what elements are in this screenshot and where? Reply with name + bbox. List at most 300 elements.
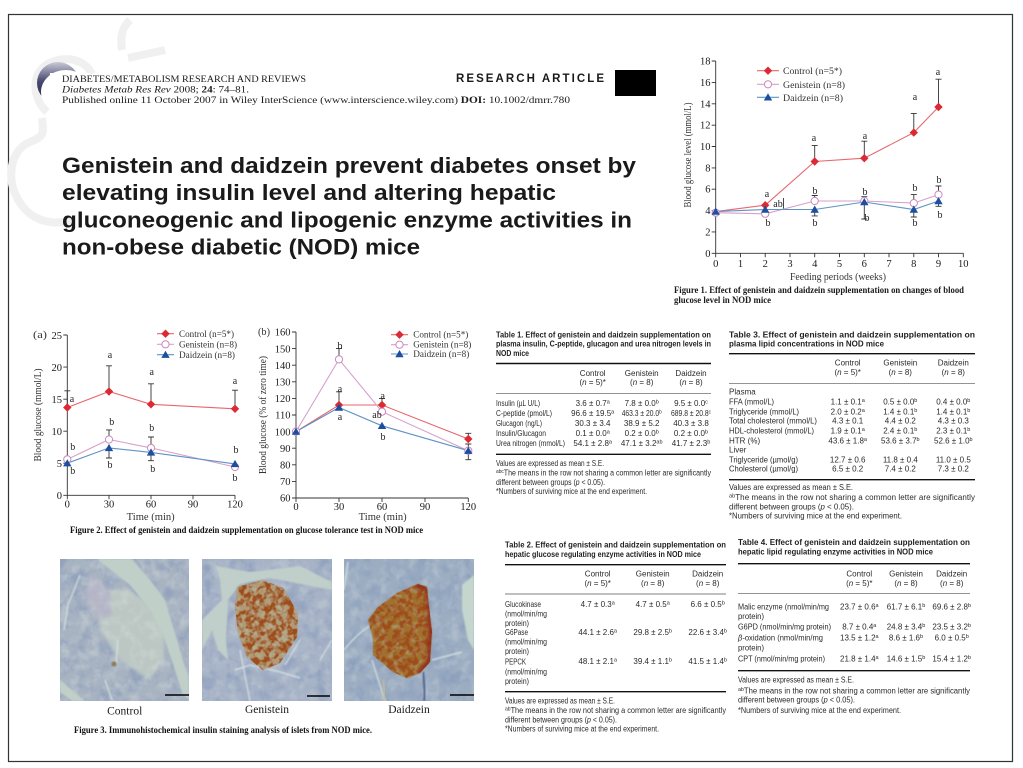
table 2: 4.7 ± 0.5: [636, 600, 667, 609]
table 1: 0.1 ± 0.0: [576, 429, 607, 438]
figure 2b line chart: 150: [275, 344, 290, 355]
figure 2a line chart: Time (min): [127, 512, 175, 523]
table 4: Genistein: [889, 570, 923, 579]
figure 2b line chart: 60: [280, 494, 290, 505]
figure 2 caption: Figure 2. Effect of genistein and daidzein supplementation on glucose tolerance test in NOD mice: [70, 525, 423, 535]
table 4: b: [922, 623, 925, 629]
table 1: Values are expressed as mean ± S.E.: [496, 459, 604, 468]
table 4: ab: [738, 687, 744, 693]
figure 1 line chart: 0: [705, 249, 710, 260]
table 4: 24.8 ± 3.4: [887, 622, 922, 631]
figure 2a line chart: Daidzein (n=8): [179, 350, 235, 361]
table 1: The means in the row not sharing a common letter are significantly: [504, 468, 711, 477]
figure 1 line chart: b: [812, 218, 818, 229]
figure 2a line chart: 25: [52, 331, 62, 342]
table 3: b: [914, 408, 917, 414]
table 3: Daidzein: [938, 359, 969, 368]
table 2: [505, 540, 727, 734]
table 3: Control: [835, 359, 861, 368]
table 3: 4.4 ± 0.2: [885, 417, 916, 426]
figure 2a line chart: 20: [52, 363, 62, 374]
table 2: protein): [505, 619, 529, 628]
figure 2a line chart: b: [234, 445, 238, 456]
table 1: c: [709, 410, 711, 416]
table 4: b: [968, 603, 971, 609]
figure 2a line chart: b: [70, 466, 75, 477]
figure 1 line chart: b: [864, 213, 870, 224]
figure 2b line chart: 120: [275, 394, 290, 405]
table 3: 2.4 ± 0.1: [883, 426, 914, 435]
table 2: b: [722, 600, 725, 606]
table 4: a: [876, 603, 880, 609]
figure 1 line chart: 9: [936, 259, 941, 270]
journal citation header: Published online 11 October 2007 in Wiley InterScience (www.interscience.wiley.com) DOI: 10.1002/dmrr.780: [62, 95, 570, 106]
table 4: 21.8 ± 1.4: [840, 655, 876, 664]
figure 2b line chart: 160: [275, 328, 290, 339]
figure 3 caption: Figure 3. Immunohistochemical insulin staining analysis of islets from NOD mice.: [74, 725, 372, 735]
table 2: b: [669, 658, 672, 664]
table 2: b: [724, 658, 727, 664]
table 1: NOD mice: [496, 348, 529, 358]
figure 2a line chart: Genistein (n=8): [179, 340, 237, 350]
figure 1 line chart: a: [936, 67, 941, 78]
table 3: 7.3 ± 0.2: [938, 465, 969, 474]
table 1: abc: [496, 469, 504, 475]
table 4: Daidzein: [936, 570, 967, 579]
figure 1 line chart: 12: [700, 121, 710, 132]
table 3: Plasma: [729, 388, 756, 397]
table 1: 40.3 ± 3.8: [673, 419, 709, 428]
table 1: different between groups (p < 0.05).: [496, 478, 605, 487]
table 1: a: [607, 400, 611, 406]
table 4: different between groups (p < 0.05).: [738, 696, 855, 705]
figure 2a line chart: a: [70, 394, 75, 405]
table 4: protein): [738, 612, 764, 621]
title: Genistein and daidzein prevent diabetes onset by: [62, 153, 637, 178]
table 1: 0.2 ± 0.0: [625, 429, 656, 438]
figure 2b line chart: a: [338, 384, 343, 395]
figure 2b line chart: 130: [275, 378, 290, 388]
figure 2a line chart: 0: [65, 500, 70, 510]
micrograph: control: [60, 559, 189, 701]
table 3: a: [862, 398, 866, 404]
table 3: Values are expressed as mean ± S.E.: [729, 483, 853, 492]
figure 1 line chart: b: [912, 218, 918, 229]
figure 1 line chart: a: [812, 133, 817, 144]
table 4: (n = 8): [940, 579, 964, 588]
table 2: (n = 8): [696, 579, 720, 588]
table 1: 38.9 ± 5.2: [624, 419, 660, 428]
table 3: (n = 8): [942, 368, 965, 377]
figure 2a line chart: (a): [33, 330, 48, 341]
figure 1 line chart: a: [765, 189, 770, 200]
table 4: Malic enzyme (nmol/min/mg: [738, 602, 829, 611]
figure 2b line chart: b: [380, 432, 386, 443]
table 3: Total cholesterol (mmol/L): [729, 417, 817, 426]
table 1: ab: [656, 440, 663, 446]
table 1: b: [659, 410, 662, 416]
figure 2a line chart: b: [70, 442, 75, 453]
table 1: Table 1. Effect of genistein and daidzein supplementation on: [496, 330, 711, 340]
figure 2b line chart: Time (min): [359, 512, 407, 523]
table 3: 11.0 ± 0.5: [936, 455, 971, 464]
table 2: Control: [585, 570, 611, 579]
table 2: protein): [505, 647, 529, 656]
table 4: β-oxidation (nmol/min/mg: [737, 633, 823, 642]
figure 2a line chart: 0: [57, 491, 62, 502]
table 1: Genistein: [625, 369, 659, 378]
table 1: *Numbers of surviving mice at the end experiment.: [496, 487, 647, 496]
table 1: Daidzein: [675, 369, 707, 378]
table 3: 53.6 ± 3.7: [881, 436, 917, 445]
table 3: b: [914, 427, 917, 433]
table 2: The means in the row not sharing a common letter are significantly: [511, 706, 726, 715]
figure 1 line chart: 2: [705, 227, 710, 238]
table 4: hepatic lipid regulating enzyme activities in NOD mice: [738, 546, 933, 556]
table 1: 7.8 ± 0.0: [625, 399, 656, 408]
table 4: The means in the row not sharing a common letter are significantly: [744, 686, 970, 695]
table 2: (nmol/min/mg: [505, 667, 547, 676]
table 3: (n = 8): [889, 368, 912, 377]
table 3: b: [914, 398, 917, 404]
figure 1 line chart: b: [766, 218, 770, 229]
table 2: 44.1 ± 2.6: [578, 628, 614, 637]
table 1: [496, 330, 711, 496]
table 1: b: [656, 400, 659, 406]
table 3: HTR (%): [729, 436, 760, 445]
table 4: 8.6 ± 1.6: [889, 633, 920, 642]
journal logo watermark: [11, 20, 165, 222]
figure 2b line chart: 70: [280, 477, 290, 488]
table 4: a: [873, 623, 877, 629]
table 3: plasma lipid concentrations in NOD mice: [729, 339, 884, 349]
figure 2b line chart: a: [338, 412, 343, 423]
figure 1 caption: [674, 285, 964, 305]
table 2: 4.7 ± 0.3: [581, 600, 612, 609]
figure 2b line chart: 100: [275, 427, 290, 438]
figure 1 line chart: 3: [787, 259, 793, 270]
table 2: Daidzein: [692, 570, 723, 579]
table 3: 0.4 ± 0.0: [936, 397, 967, 406]
journal citation header: DIABETES/METABOLISM RESEARCH AND REVIEWS: [62, 75, 306, 85]
table 3: b: [917, 437, 920, 443]
figure 2a line chart: Blood glucose (mmol/L): [33, 368, 44, 462]
table 4: 61.7 ± 6.1: [887, 602, 922, 611]
figure 2b line chart: 60: [377, 502, 387, 513]
micrograph: genistein: [202, 559, 332, 701]
table 2: b: [724, 628, 727, 634]
table 3: 2.3 ± 0.1: [936, 426, 967, 435]
table 2: (nmol/min/mg: [505, 610, 547, 619]
table 1: (n = 8): [630, 378, 654, 387]
figure 2b line chart: (b): [258, 327, 270, 338]
figure 1 line chart: Feeding periods (weeks): [790, 272, 886, 283]
table 4: (n = 5)*: [846, 579, 873, 588]
title: non-obese diabetic (NOD) mice: [62, 234, 420, 260]
table 1: a: [611, 410, 615, 416]
table 4: Control: [846, 570, 872, 579]
micrograph label: genistein: Genistein: [245, 704, 289, 716]
figure 2a line chart: b: [149, 423, 154, 434]
table 1: (n = 5)*: [579, 378, 606, 387]
figure 1 line chart: Blood glucose level (mmol/L): [683, 102, 694, 208]
table 3: 1.4 ± 0.1: [936, 407, 967, 416]
micrograph label: daidzein: Daidzein: [388, 704, 430, 716]
table 1: Urea nitrogen (mmol/L): [496, 439, 565, 448]
table 4: 15.4 ± 1.2: [932, 655, 968, 664]
table 1: 463.3 ± 20.0: [622, 409, 666, 418]
figure 2a line chart: 5: [57, 459, 62, 470]
table 3: b: [967, 408, 970, 414]
figure 1 line chart: 4: [812, 259, 818, 270]
figure 1 line chart: b: [862, 187, 868, 198]
table 2: 39.4 ± 1.1: [633, 657, 669, 666]
table 2: ab: [505, 706, 511, 712]
table 2: Glucokinase: [505, 600, 541, 609]
figure 1 line chart: b: [912, 183, 918, 194]
figure 2b line chart: ab: [372, 410, 382, 421]
table 4: 23.5 ± 3.2: [932, 622, 968, 631]
figure 2a line chart: [33, 329, 243, 523]
table 3: a: [864, 437, 868, 443]
figure 2a line chart: b: [232, 473, 238, 484]
table 3: Liver: [729, 446, 747, 455]
table 3: 0.5 ± 0.0: [883, 397, 914, 406]
figure 2a line chart: b: [150, 464, 155, 475]
figure 1 line chart: [683, 56, 969, 283]
table 4: b: [966, 634, 969, 640]
figure 2a line chart: Control (n=5*): [179, 329, 234, 340]
table 3: 12.7 ± 0.6: [830, 455, 866, 464]
table 1: 47.1 ± 3.2: [621, 439, 656, 448]
table 1: C-peptide (pmol/L): [496, 409, 552, 418]
table 2: a: [614, 628, 618, 634]
figure 2a line chart: 10: [52, 427, 62, 438]
table 2: Genistein: [636, 570, 670, 579]
table 4: b: [922, 655, 925, 661]
figure 1 line chart: Daidzein (n=8): [783, 93, 843, 104]
table 2: b: [669, 628, 672, 634]
table 4: Table 4. Effect of genistein and daidzein supplementation on: [738, 537, 970, 547]
table 2: a: [667, 600, 671, 606]
table 4: 6.0 ± 0.5: [935, 633, 966, 642]
table 3: [729, 329, 975, 520]
table 4: protein): [738, 643, 764, 652]
figure 1 line chart: ab: [773, 199, 783, 210]
table 2: (n = 5)*: [584, 579, 611, 588]
table 2: Table 2. Effect of genistein and daidzein supplementation on: [505, 540, 726, 550]
figure 2b line chart: Daidzein (n=8): [413, 349, 469, 360]
figure 1 line chart: b: [812, 186, 818, 197]
table 3: b: [967, 398, 970, 404]
table 1: b: [705, 430, 708, 436]
table 4: 69.6 ± 2.8: [932, 602, 968, 611]
figure 2b line chart: 120: [460, 502, 476, 513]
figure 2b line chart: Control (n=5*): [413, 330, 468, 340]
figure 2a line chart: 90: [188, 500, 198, 510]
table 3: 2.0 ± 0.2: [831, 407, 862, 416]
table 1: a: [609, 440, 613, 446]
table 3: ab: [729, 494, 735, 500]
table 4: *Numbers of surviving mice at the end experiment.: [738, 706, 901, 715]
figure 2b line chart: 80: [280, 460, 290, 472]
title: elevating insulin level and altering hepatic: [62, 180, 556, 205]
table 2: 29.8 ± 2.5: [633, 628, 669, 637]
table 1: (n = 8): [679, 378, 703, 387]
figure 1 line chart: Control (n=5*): [783, 66, 842, 77]
table 1: b: [707, 440, 710, 446]
figure 1 line chart: b: [938, 210, 942, 221]
figure 1 line chart: 2: [763, 259, 768, 270]
table 2: 22.6 ± 3.4: [688, 628, 724, 637]
table 3: a: [862, 408, 866, 414]
table 1: Insulin/Glucagon: [496, 429, 546, 438]
research article label: RESEARCH ARTICLE: [456, 73, 604, 85]
table 3: 1.4 ± 0.1: [883, 407, 914, 416]
table 3: Cholesterol (µmol/g): [729, 465, 798, 474]
figure 2a line chart: a: [108, 350, 113, 361]
figure 1 caption: glucose level in NOD mice: [674, 295, 771, 305]
title: gluconeogenic and lipogenic enzyme activities in: [62, 208, 632, 232]
table 4: b: [920, 634, 923, 640]
table 1: plasma insulin, C-peptide, glucagon and urea nitrogen levels in: [496, 339, 711, 349]
table 3: Genistein: [883, 359, 917, 368]
figure 1 line chart: 10: [700, 142, 710, 153]
figure 1 line chart: 1: [738, 259, 743, 270]
figure 1 line chart: 10: [958, 259, 969, 270]
micrograph: daidzein: [344, 559, 474, 701]
figure 2a line chart: 30: [104, 500, 114, 510]
title: [62, 153, 637, 260]
table 4: 8.7 ± 0.4: [842, 622, 873, 631]
table 4: a: [876, 655, 880, 661]
table 4: G6PD (nmol/min/mg protein): [738, 622, 831, 631]
table 3: 1.9 ± 0.1: [831, 426, 862, 435]
figure 2b line chart: b: [338, 341, 342, 352]
figure 1 caption: Figure 1. Effect of genistein and daidzein supplementation on changes of blood: [674, 285, 964, 295]
table 1: Insulin (µL U/L): [496, 399, 540, 408]
black redaction box: [615, 70, 656, 96]
figure 1 line chart: a: [913, 92, 918, 103]
table 1: 30.3 ± 3.4: [575, 419, 611, 428]
table 3: Triglyceride (mmol/L): [729, 407, 799, 416]
figure 1 line chart: 16: [700, 78, 710, 89]
table 4: 13.5 ± 1.2: [840, 633, 876, 642]
table 1: Glucagon (ng/L): [496, 419, 542, 428]
table 1: 3.6 ± 0.7: [576, 399, 607, 408]
figure 2b line chart: 30: [334, 502, 344, 513]
table 3: 7.4 ± 0.2: [885, 465, 916, 474]
table 3: 4.3 ± 0.1: [832, 417, 864, 426]
table 2: a: [612, 600, 616, 606]
table 3: b: [967, 427, 970, 433]
figure 2b line chart: 90: [420, 502, 430, 513]
table 1: c: [705, 400, 708, 406]
table 3: 1.1 ± 0.1: [831, 397, 862, 406]
figure 2a line chart: 120: [227, 500, 243, 510]
table 4: b: [922, 603, 925, 609]
table 4: b: [968, 623, 971, 629]
figure 2b line chart: [258, 327, 476, 523]
table 3: Triglyceride (µmol/g): [729, 455, 798, 464]
table 2: *Numbers of surviving mice at the end experiment.: [505, 725, 659, 734]
figure 2b line chart: 90: [280, 444, 290, 455]
table 3: *Numbers of surviving mice at the end experiment.: [729, 511, 902, 520]
figure 2b line chart: Blood glucose (% of zero time): [258, 356, 269, 474]
table 3: b: [970, 437, 973, 443]
table 1: a: [607, 430, 611, 436]
figure 2a line chart: 15: [52, 395, 62, 406]
table 1: 9.5 ± 0.0: [674, 399, 705, 408]
table 2: 6.6 ± 0.5: [691, 600, 722, 609]
table 2: different between groups (p < 0.05).: [505, 715, 617, 724]
figure 1 line chart: 6: [705, 185, 710, 196]
table 3: 43.6 ± 1.8: [828, 436, 864, 445]
table 3: (n = 5)*: [834, 368, 861, 377]
table 4: (n = 8): [894, 579, 918, 588]
table 3: a: [862, 427, 866, 433]
figure 2a line chart: 60: [146, 500, 156, 510]
table 3: 52.6 ± 1.0: [934, 436, 970, 445]
figure 2b line chart: 140: [275, 361, 290, 372]
table 1: 96.6 ± 19.5: [571, 409, 611, 418]
figure 2b line chart: Genistein (n=8): [413, 340, 471, 350]
table 3: The means in the row not sharing a common letter are significantly: [735, 493, 975, 502]
table 3: HDL-cholesterol (mmol/L): [729, 426, 814, 435]
journal citation header: Diabetes Metab Res Rev 2008; 24: 74–81.: [61, 86, 249, 96]
figure 2a line chart: b: [108, 460, 112, 471]
figure 1 line chart: 8: [911, 259, 916, 270]
table 2: Values are expressed as mean ± S.E.: [505, 696, 615, 705]
table 3: 6.5 ± 0.2: [832, 465, 864, 474]
table 4: [737, 537, 971, 715]
figure 2a line chart: a: [233, 376, 238, 387]
table 3: 11.8 ± 0.4: [883, 455, 918, 464]
figure 2b line chart: 0: [293, 502, 299, 513]
figure 1 line chart: 7: [886, 259, 892, 270]
table 1: 689.8 ± 20.8: [671, 409, 715, 418]
table 3: Table 3. Effect of genistein and daidzein supplementation on: [729, 329, 975, 339]
table 1: Control: [580, 369, 606, 378]
figure 1 line chart: 5: [837, 259, 842, 270]
table 3: 4.3 ± 0.3: [938, 417, 969, 426]
table 4: 14.6 ± 1.5: [887, 655, 922, 664]
table 2: protein): [505, 677, 529, 686]
table 2: (n = 8): [641, 579, 665, 588]
table 4: a: [876, 634, 880, 640]
table 2: G6Pase: [505, 628, 528, 637]
table 1: b: [656, 430, 659, 436]
table 4: b: [968, 655, 971, 661]
figure 1 line chart: a: [863, 131, 868, 142]
figure 1 line chart: 0: [713, 259, 718, 270]
table 4: Values are expressed as mean ± S.E.: [738, 676, 854, 685]
micrograph label: control: Control: [107, 706, 142, 718]
figure 1 line chart: 8: [705, 163, 710, 174]
table 2: PEPCK: [505, 658, 527, 667]
table 3: FFA (mmol/L): [729, 397, 774, 406]
table 1: 0.2 ± 0.0: [674, 429, 705, 438]
figure 2b line chart: 110: [275, 411, 290, 422]
journal citation header: [61, 75, 570, 106]
figure 1 line chart: 14: [700, 99, 711, 110]
table 2: 48.1 ± 2.1: [578, 657, 614, 666]
table 4: CPT (nmol/min/mg protein): [738, 655, 825, 664]
table 1: 41.7 ± 2.3: [672, 439, 707, 448]
table 2: (nmol/min/mg: [505, 638, 547, 647]
table 1: 54.1 ± 2.8: [573, 439, 609, 448]
figure 1 line chart: 6: [862, 259, 867, 270]
